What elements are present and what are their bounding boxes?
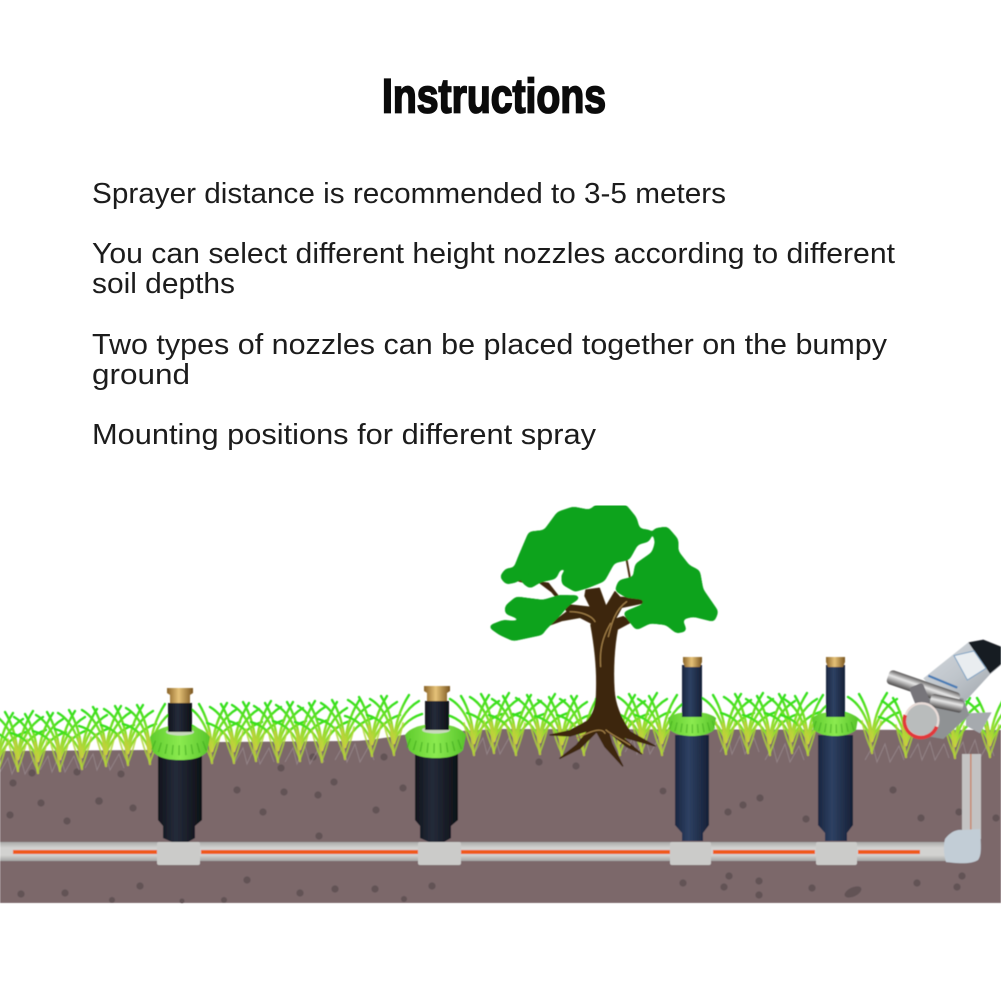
sprinkler 1: short nozzle <box>150 688 210 842</box>
water flow <box>13 850 920 854</box>
sprinkler body <box>675 735 709 841</box>
pump head <box>917 692 969 739</box>
tree canopy <box>491 506 717 639</box>
sprinkler body <box>158 755 202 842</box>
pressure gauge <box>904 703 938 738</box>
grass <box>0 693 1001 773</box>
paragraph: nozzle height: soil depths <box>92 268 235 300</box>
green collar <box>812 712 858 736</box>
brass head <box>167 688 193 704</box>
line: sprayer distance: Sprayer distance is recommended to 3-5 meters <box>92 178 726 210</box>
line: mounting positions: Mounting positions for different spray <box>92 419 597 451</box>
green collar <box>150 725 210 760</box>
paragraph: two nozzle types <box>92 329 888 391</box>
title: Instructions <box>382 70 606 124</box>
sprinkler 3: tall nozzle <box>668 657 716 841</box>
text block: instructions <box>92 178 895 451</box>
pipe elbow <box>944 829 981 863</box>
mounting bracket <box>966 712 992 733</box>
horizontal water pipe <box>0 842 950 861</box>
sprinkler 2: short nozzle <box>405 686 466 842</box>
brass head <box>424 686 450 702</box>
tree <box>491 506 717 766</box>
water pump <box>886 640 1001 739</box>
vertical water pipe <box>962 754 981 839</box>
paragraph: nozzle height: You can select different height nozzles according to different <box>92 238 895 270</box>
sprinkler 4: tall nozzle <box>812 657 858 841</box>
green collar <box>668 712 716 736</box>
riser stem <box>826 665 845 717</box>
steel outlet pipes <box>886 669 964 713</box>
grass roots <box>0 736 994 774</box>
green collar <box>405 724 466 758</box>
pump motor body <box>923 640 1001 702</box>
paragraph: two nozzle types: ground <box>92 359 190 391</box>
paragraph: nozzle height <box>92 238 895 300</box>
riser stem <box>682 665 702 717</box>
soil <box>0 729 1001 903</box>
sprinkler body <box>415 754 458 842</box>
riser stem <box>168 703 192 732</box>
paragraph: two nozzle types: Two types of nozzles can be placed together on the bumpy <box>92 329 888 361</box>
brass head <box>683 657 702 667</box>
illustration: irrigation system cross-section <box>0 506 1001 904</box>
brass head <box>826 657 845 667</box>
sprinkler body <box>818 735 853 841</box>
pipe tee fittings <box>157 842 857 865</box>
riser stem <box>425 701 449 730</box>
tree trunk and roots <box>517 560 657 766</box>
soil pebbles <box>6 753 1000 904</box>
